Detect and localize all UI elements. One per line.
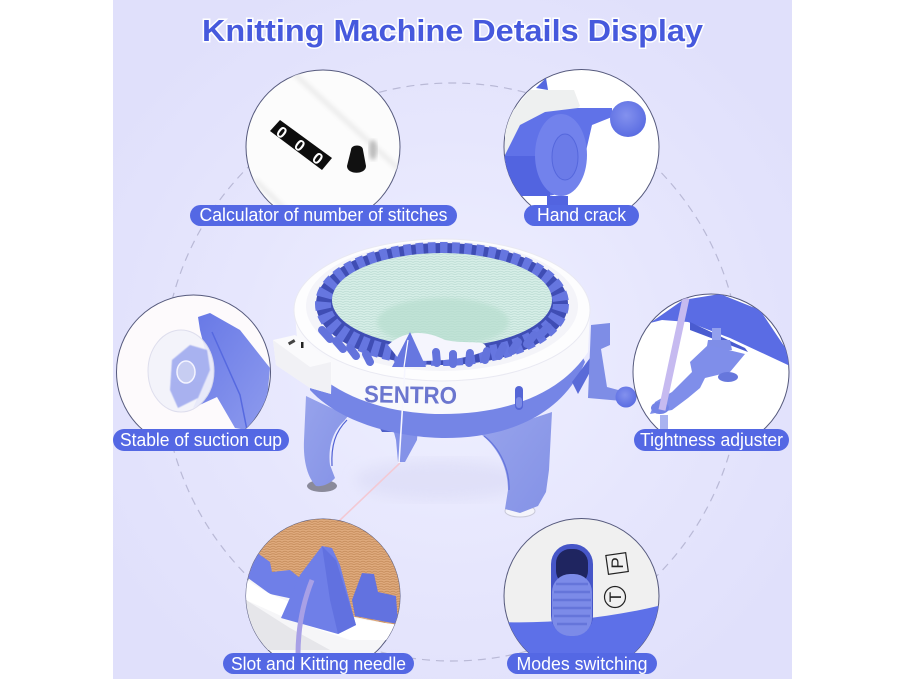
counter digits [270, 120, 332, 170]
top ring [294, 239, 590, 381]
panel: calculator of stitches [246, 70, 400, 205]
label: calculator: Calculator of number of stitches [200, 205, 448, 225]
yarn tail [338, 463, 400, 522]
P T marks [604, 553, 628, 608]
white cloth [388, 333, 486, 361]
hand crank arm [572, 358, 590, 394]
white body [295, 312, 590, 414]
counter digits: 0 [272, 124, 290, 143]
suction feet [307, 480, 337, 492]
panel: tightness adjuster [632, 294, 790, 429]
blue base band [310, 340, 585, 438]
title: Knitting Machine Details Display [202, 13, 704, 48]
knitting needle triangle [392, 332, 426, 367]
counter digits: 0 [290, 137, 308, 156]
P T marks: T [606, 592, 625, 602]
label: slot: Slot and Kitting needle [231, 654, 406, 674]
counter digits: 0 [308, 150, 326, 169]
panel: hand crank [504, 69, 660, 206]
label: modes: Modes switching [516, 654, 648, 674]
P T marks: P [608, 557, 627, 569]
dashed orbit ring [163, 83, 741, 661]
white yarn [399, 367, 405, 463]
lavender background panel [113, 0, 792, 679]
label: suction: Stable of suction cup [120, 430, 282, 450]
central knitting machine [273, 239, 636, 522]
needle ring [316, 243, 568, 365]
counter knob [347, 146, 366, 173]
knitted fabric [332, 253, 552, 347]
centre yarn tensioner [392, 425, 418, 462]
label: tightness: Tightness adjuster [640, 430, 783, 450]
front teeth [322, 327, 548, 364]
hand crank [588, 323, 622, 401]
left leg [304, 396, 348, 486]
infographic canvas [113, 0, 792, 679]
label: hand crack: Hand crack [537, 205, 627, 225]
panel: suction cup [116, 294, 271, 429]
SENTRO logo: SENTRO [364, 381, 457, 410]
panel: modes switching [504, 518, 660, 653]
counter box [273, 335, 332, 394]
photo circle [246, 70, 400, 224]
right leg [482, 412, 552, 513]
machine shadow [355, 460, 525, 500]
mode slider [515, 386, 523, 410]
panel: slot and knitting needle [246, 518, 400, 653]
